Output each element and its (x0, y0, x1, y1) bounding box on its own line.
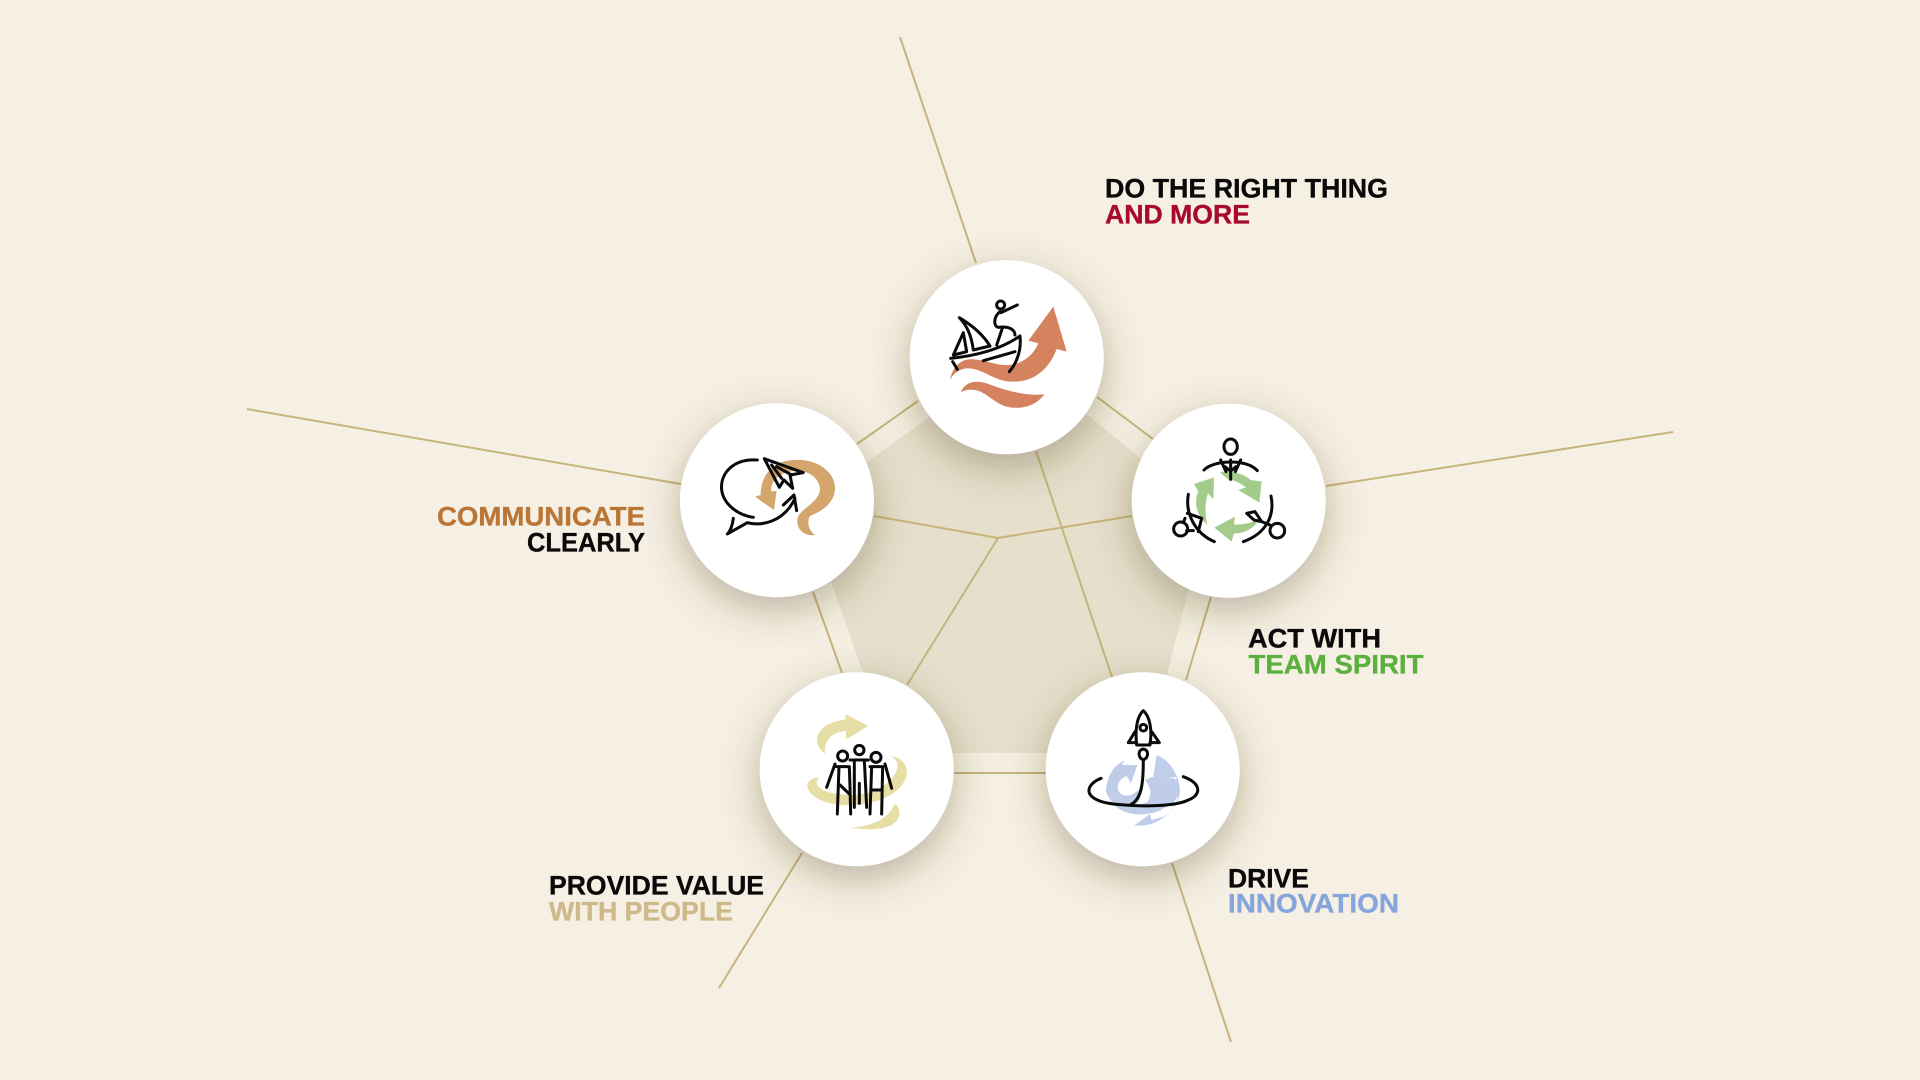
label: drive innovation (1228, 863, 1399, 919)
label: communicate clearly: COMMUNICATE (437, 502, 645, 532)
pentagon: outer light band (780, 334, 1240, 773)
pentagon: inner core (805, 355, 1208, 753)
node: drive innovation (1046, 672, 1240, 866)
circle (760, 672, 954, 866)
label: communicate clearly (437, 502, 645, 557)
label: drive innovation: INNOVATION (1228, 889, 1399, 919)
circle (910, 260, 1104, 454)
label: provide value with people (549, 870, 764, 926)
icon: speech bubbles with paper plane (722, 459, 835, 535)
label: act with team spirit (1248, 624, 1424, 679)
circle (1132, 404, 1326, 598)
circle (680, 403, 874, 597)
label: do the right thing and more: AND MORE (1105, 199, 1250, 229)
node: communicate clearly (680, 403, 874, 597)
label: drive innovation: DRIVE (1228, 863, 1309, 893)
label: communicate clearly: CLEARLY (527, 527, 645, 557)
label: provide value with people: WITH PEOPLE (549, 896, 733, 926)
label: act with team spirit: ACT WITH (1248, 624, 1381, 654)
label: act with team spirit: TEAM SPIRIT (1248, 649, 1424, 679)
label: do the right thing and more: DO THE RIGHT THING (1105, 174, 1388, 204)
icon: rocket launching from orbit (1089, 711, 1198, 826)
label: provide value with people: PROVIDE VALUE (549, 870, 764, 900)
icon: ship on waves with arrow (950, 301, 1067, 408)
node: provide value with people (760, 672, 954, 866)
icon: three people with swirling arrows (807, 714, 907, 829)
connecting lines (247, 37, 1673, 1042)
circle (1046, 672, 1240, 866)
node: do the right thing (910, 260, 1104, 454)
node: act with team spirit (1132, 404, 1326, 598)
icon: team with recycling arrows (1174, 439, 1285, 542)
label: do the right thing and more (1105, 174, 1388, 229)
